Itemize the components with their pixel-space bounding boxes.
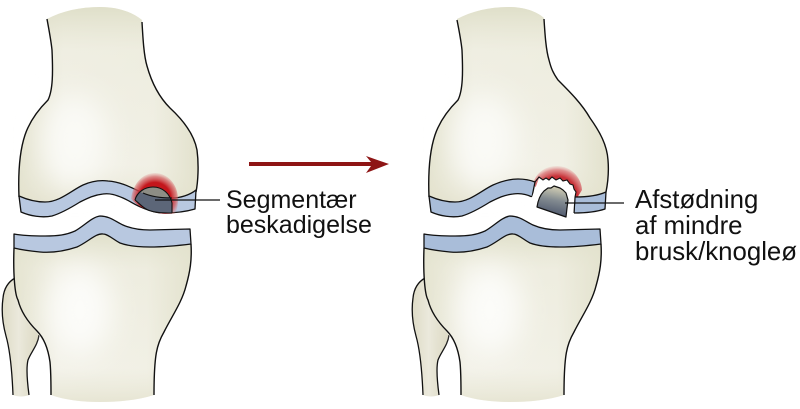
leader line: segmental damage: [155, 199, 220, 201]
leader line: fragment: [565, 202, 624, 204]
label: detached fragment: brusk/knogleø: [635, 238, 797, 266]
lower leg bones, right: [412, 216, 601, 402]
panel: intact knee joint with segmental damage: [2, 7, 220, 402]
detached fragment: [537, 186, 568, 217]
fibula: [2, 278, 39, 396]
lesion glow: [131, 173, 178, 214]
label: segmental damage: Segmentær: [226, 186, 357, 214]
label: detached fragment: af mindre: [635, 212, 743, 240]
label: segmental damage: beskadigelse: [226, 211, 372, 239]
arrow: [249, 156, 389, 173]
femur, right: [429, 7, 608, 204]
panel: knee joint with detached fragment: [412, 7, 624, 402]
fibula, right: [412, 278, 449, 396]
femoral cartilage, left piece: [429, 179, 535, 217]
femur: [19, 7, 198, 204]
scalloped defect edge: [535, 177, 576, 213]
defect glow: [533, 166, 582, 198]
tibia, right: [424, 232, 601, 402]
tibial cartilage, right: [424, 216, 601, 252]
femoral cartilage, right piece: [574, 192, 606, 213]
tibia: [14, 232, 191, 402]
cartilage lesion: [135, 187, 172, 213]
tibial cartilage: [14, 216, 191, 252]
white defect cavity: [520, 177, 576, 222]
label: detached fragment: Afstødning: [635, 186, 758, 214]
lower leg bones: [2, 216, 191, 402]
femoral cartilage: [19, 181, 196, 217]
